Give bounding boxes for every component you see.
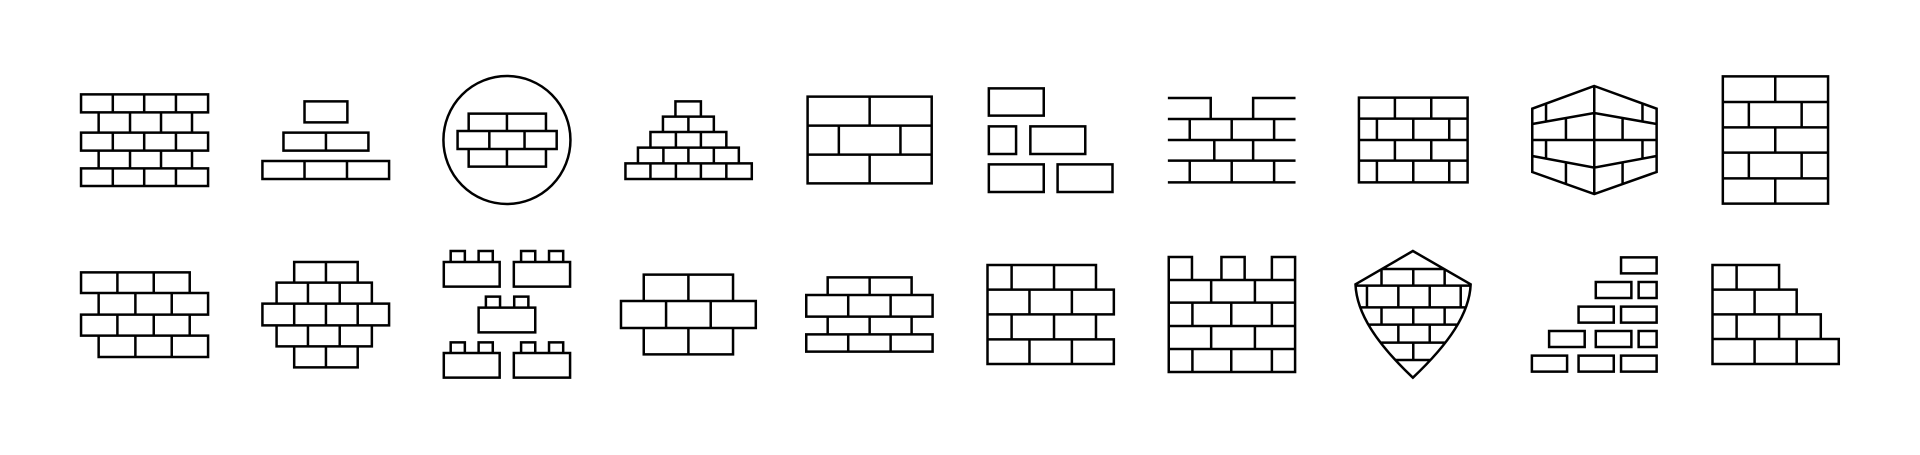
icon: hexagonal brick cluster bbox=[262, 262, 389, 367]
icon: brick shield bbox=[1355, 251, 1471, 378]
icon: square brick wall bbox=[1359, 98, 1468, 182]
icon: bricks in a circle bbox=[443, 76, 570, 204]
icon: offset brick rows bbox=[81, 272, 208, 357]
icon: low brick wall bbox=[806, 277, 933, 352]
icon: staircase of loose bricks bbox=[1532, 257, 1657, 372]
icon: tall brick wall bbox=[1723, 76, 1828, 204]
icon: stepped brick wall bbox=[1712, 265, 1839, 364]
icon: toy building blocks bbox=[444, 251, 570, 378]
icon: brick pyramid bbox=[625, 101, 752, 179]
icon: stacked bricks three tiers bbox=[262, 101, 389, 179]
icon: loose separate bricks bbox=[989, 88, 1113, 192]
icon: brick wall with jagged right edge bbox=[988, 265, 1114, 364]
icon: broken open-sided wall bbox=[1168, 98, 1296, 182]
icon: castle battlement wall bbox=[1169, 257, 1295, 372]
icon: seven large bricks bbox=[621, 275, 756, 354]
icon: brick wall corner in perspective bbox=[1532, 86, 1657, 194]
icon: brick wall five rows bbox=[81, 94, 208, 186]
icon: large brick wall three rows bbox=[808, 97, 932, 183]
